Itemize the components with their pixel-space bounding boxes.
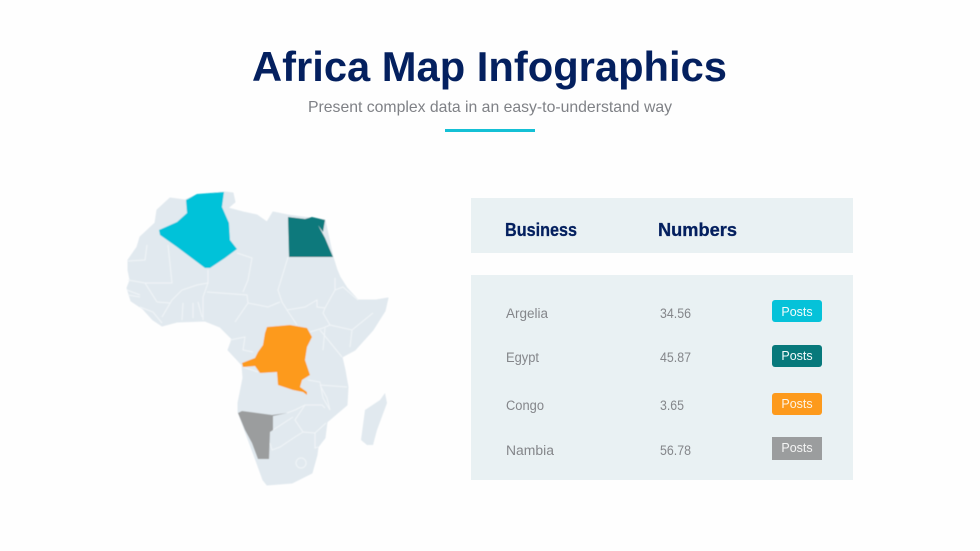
row: Nambia <box>506 437 822 460</box>
country: Namibia <box>238 411 287 459</box>
row: Egypt: 45.87 <box>660 350 691 365</box>
continent base <box>127 192 388 485</box>
map of Africa <box>127 192 388 485</box>
row: Egypt: Egypt <box>506 350 539 365</box>
country: Algeria <box>159 192 237 268</box>
row: Nambia: Posts <box>781 441 813 455</box>
country borders <box>127 245 373 468</box>
row: Argelia <box>506 300 822 322</box>
accent underline <box>445 129 535 132</box>
column heading: Numbers: Numbers <box>658 219 737 240</box>
row: Egypt: Posts <box>781 349 813 363</box>
row: Argelia: 34.56 <box>660 306 691 321</box>
subtitle: Present complex data in an easy-to-understand way <box>308 99 672 116</box>
row: Congo <box>506 393 822 415</box>
title: Africa Map Infographics <box>252 43 727 90</box>
column heading: Business: Business <box>505 219 577 240</box>
row: Congo: Congo <box>506 398 544 413</box>
row: Argelia: Posts <box>781 305 813 319</box>
row: Congo: Posts <box>781 397 813 411</box>
country: Egypt <box>288 217 333 257</box>
country: Congo <box>242 325 312 395</box>
row: Congo: 3.65 <box>660 398 684 413</box>
row: Nambia: 56.78 <box>660 443 691 458</box>
row: Egypt <box>506 345 822 367</box>
row: Nambia: Nambia <box>506 443 554 458</box>
table body panel <box>471 275 853 480</box>
row: Argelia: Argelia <box>506 306 548 321</box>
Madagascar <box>361 393 387 445</box>
table header panel <box>471 198 853 253</box>
